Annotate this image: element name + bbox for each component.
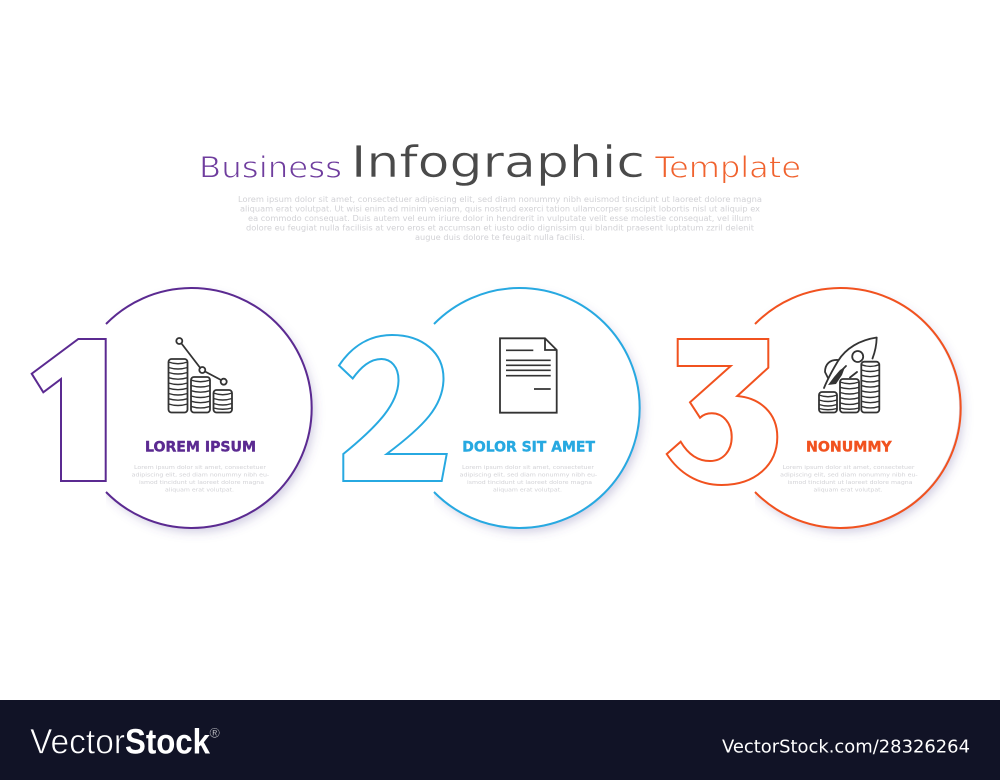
footer logo: ® [210, 724, 220, 740]
body text 1: adipiscing elit, sed diam nonummy nibh eu- [132, 472, 269, 478]
body text 3 [780, 465, 918, 494]
body text 2: ismod tincidunt ut laoreet dolore magna [467, 480, 592, 486]
circle outline 2 [434, 288, 640, 528]
icon: rocket and coin stacks [819, 338, 879, 412]
heading 3: NONUMMY [806, 440, 892, 456]
body text 1: aliquam erat volutpat. [165, 488, 234, 494]
body text 1: ismod tincidunt ut laoreet dolore magna [139, 480, 264, 486]
footer logo [30, 722, 220, 761]
body text 3: Lorem ipsum dolor sit amet, consectetuer [782, 465, 915, 471]
body text 3: ismod tincidunt ut laoreet dolore magna [788, 480, 912, 486]
intro text block: Lorem ipsum dolor sit amet, consectetuer adipiscing elit, sed diam nonummy nibh euismod tincidunt ut laoreet dolore magna [238, 195, 762, 204]
footer bar [0, 700, 1000, 780]
intro text block: ea commodo consequat. Duis autem vel eum iriure dolor in hendrerit in vulputate velit esse molestie consequat, vel illum [248, 214, 752, 223]
title: Business [199, 150, 342, 184]
body text 1 [132, 465, 269, 494]
intro text block: augue duis dolore te feugait nulla facilisi. [415, 233, 585, 242]
panel: step 2 [339, 288, 640, 528]
title: Template [654, 150, 801, 184]
footer logo: Vector [30, 722, 125, 761]
intro text block [238, 195, 762, 242]
icon: coin stacks with falling chart [168, 338, 232, 412]
panel: step 1 [32, 288, 312, 528]
footer image id: VectorStock.com/28326264 [722, 736, 970, 758]
intro text block: dolore eu feugiat nulla facilisis at vero eros et accumsan et iusto odio dignissim qui blandit praesent luptatum zzril delenit [246, 224, 754, 232]
body text 1: Lorem ipsum dolor sit amet, consectetuer [134, 465, 267, 471]
numeral 3 [667, 339, 777, 485]
body text 2 [460, 465, 597, 494]
title [199, 138, 801, 188]
title: Infographic [351, 138, 645, 188]
icon: document [500, 338, 557, 413]
heading 2: DOLOR SIT AMET [462, 440, 595, 456]
circle outline 3 [755, 288, 961, 528]
numeral 1 [32, 339, 106, 481]
heading 1: LOREM IPSUM [145, 440, 256, 456]
circle outline 1 [106, 288, 312, 528]
intro text block: aliquam erat volutpat. Ut wisi enim ad minim veniam, quis nostrud exerci tation ullamcorper suscipit lobortis nisl ut aliquip ex [240, 204, 760, 214]
panel: step 3 [667, 288, 961, 528]
body text 2: adipiscing elit, sed diam nonummy nibh eu- [460, 472, 597, 478]
body text 2: Lorem ipsum dolor sit amet, consectetuer [462, 465, 595, 471]
body text 3: adipiscing elit, sed diam nonummy nibh eu- [780, 472, 918, 478]
body text 3: aliquam erat volutpat. [814, 488, 883, 494]
numeral 2 [339, 335, 447, 481]
body text 2: aliquam erat volutpat. [493, 488, 562, 494]
footer logo: Stock [125, 722, 210, 761]
